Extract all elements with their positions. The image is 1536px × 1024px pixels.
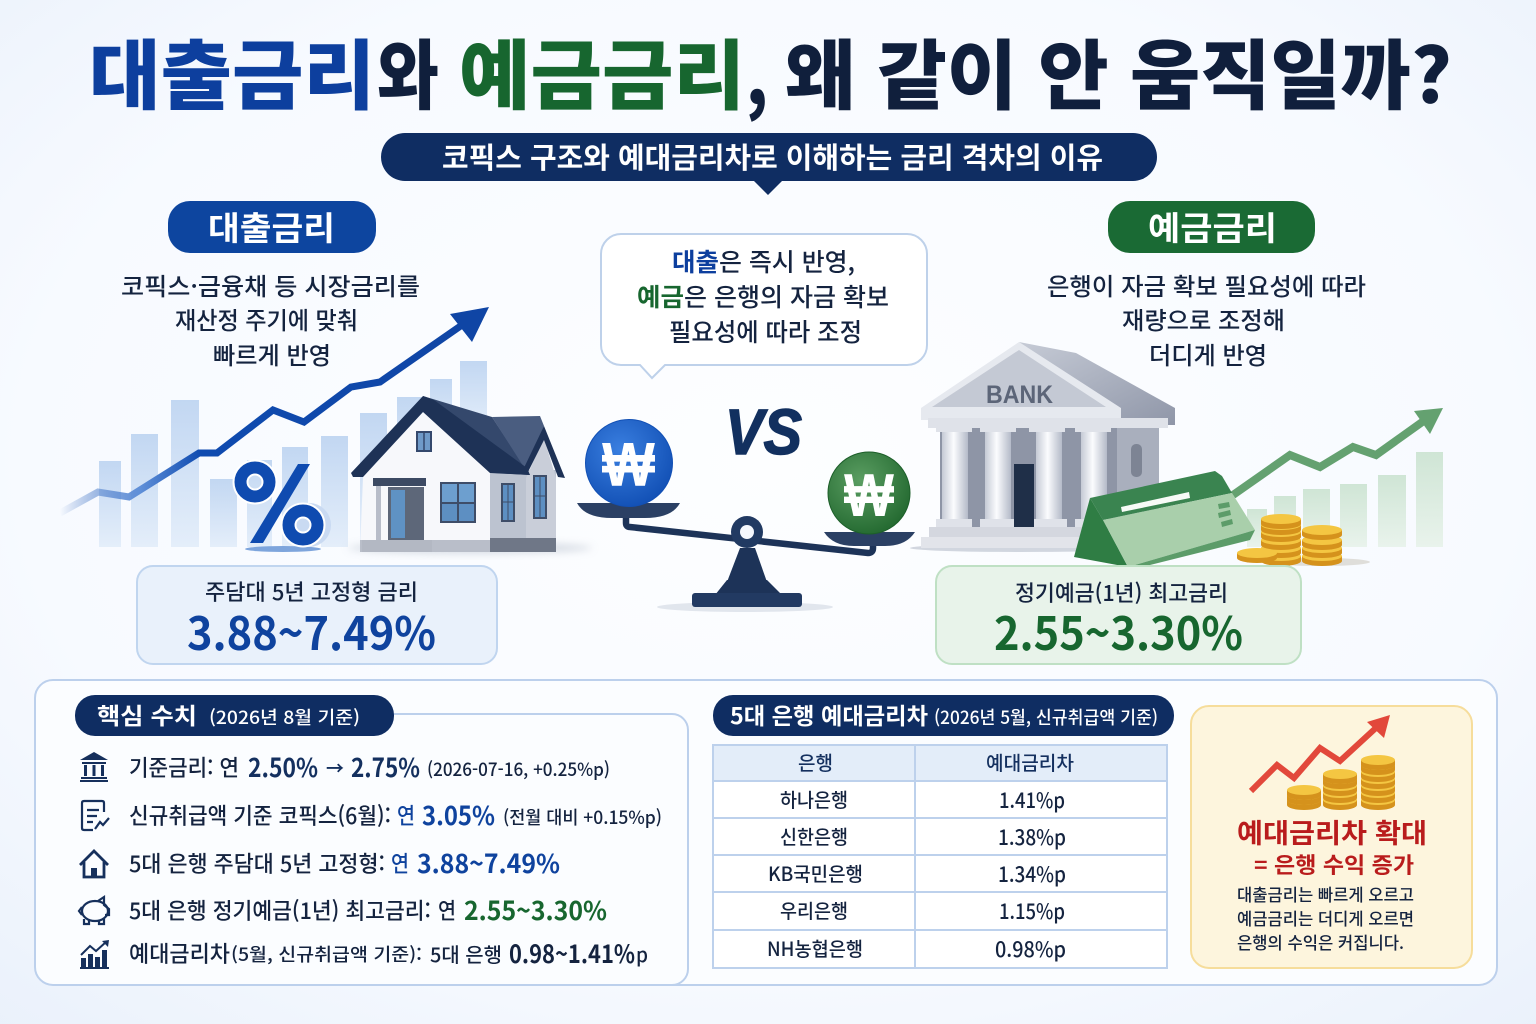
deposit rate heading: 예금금리	[1148, 202, 1277, 250]
row: COFIX: 연	[397, 799, 415, 831]
row: base rate: 기준금리: 연	[129, 751, 239, 783]
row: base rate	[80, 748, 610, 785]
callout: speech bubble: 필요성에 따라 조정	[669, 313, 862, 349]
table: 우리은행	[780, 895, 848, 924]
arrow: loan rate rising	[60, 307, 489, 513]
table: 1.15%p	[999, 896, 1065, 926]
icon: bank building	[910, 342, 1175, 552]
row: spread: 5대 은행	[430, 939, 502, 968]
icon: green won coin: ₩	[844, 462, 894, 529]
icon: bank	[80, 752, 108, 782]
icon: passbook	[1074, 471, 1255, 570]
value box: deposit rate: 2.55~3.30%	[994, 598, 1243, 664]
title: 대출금리	[89, 15, 375, 125]
loan rate description: 코픽스·금융채 등 시장금리를	[121, 267, 420, 302]
row: mortgage: 연	[391, 847, 409, 879]
title: 예금금리	[459, 15, 745, 125]
deposit rate description: 재량으로 조정해	[1122, 301, 1285, 336]
table: 1.34%p	[998, 859, 1066, 889]
table heading: (2026년 5월, 신규취급액 기준)	[934, 704, 1158, 730]
table: 1.41%p	[999, 785, 1065, 815]
table: 은행	[798, 747, 833, 776]
icon: bar chart	[80, 940, 109, 969]
value box: deposit rate	[936, 566, 1301, 664]
table heading: 5대 은행 예대금리차	[730, 697, 928, 731]
icon: bank building: BANK	[986, 381, 1053, 409]
value box: mortgage rate	[137, 566, 497, 664]
subtitle banner: 코픽스 구조와 예대금리차로 이해하는 금리 격차의 이유	[442, 135, 1103, 177]
table: NH농협은행	[767, 933, 863, 962]
panel: spread widening callout	[1191, 706, 1472, 968]
panel: spread widening callout: 대출금리는 빠르게 오르고	[1237, 881, 1414, 906]
table: 예대금리차	[986, 747, 1074, 776]
icon: piggy bank	[79, 897, 109, 924]
arrow: red rising	[1251, 715, 1390, 791]
icon: house	[348, 396, 592, 554]
table: 하나은행	[780, 784, 848, 813]
row: spread: 예대금리차	[129, 937, 230, 969]
row: base rate: →	[326, 755, 344, 781]
icon: percent	[240, 464, 331, 552]
icon: document chart	[82, 801, 109, 830]
value box: deposit rate: 정기예금(1년) 최고금리	[1015, 576, 1228, 608]
loan rate heading	[168, 201, 376, 253]
row: mortgage	[80, 844, 560, 881]
table: 1.38%p	[998, 822, 1066, 852]
icon: green won coin	[828, 452, 910, 534]
deposit rate heading	[1108, 201, 1315, 253]
bar chart: loan background bars	[99, 361, 487, 547]
bar chart: deposit background bars	[1247, 452, 1443, 547]
key figures heading: (2026년 8월 기준)	[209, 704, 360, 730]
callout: speech bubble: 은 은행의 자금 확보	[684, 278, 889, 314]
row: deposit: 연	[438, 894, 456, 926]
row: COFIX: 3.05%	[422, 796, 495, 833]
title: ,	[746, 15, 768, 125]
loan rate description: 빠르게 반영	[213, 336, 331, 371]
callout: speech bubble	[601, 234, 927, 378]
title	[89, 15, 1452, 125]
deposit rate description: 은행이 자금 확보 필요성에 따라	[1047, 267, 1366, 302]
callout: speech bubble: 예금	[637, 278, 684, 314]
table: 신한은행	[780, 821, 848, 850]
row: base rate: (2026-07-16, +0.25%p)	[427, 756, 610, 782]
key figures heading: 핵심 수치	[97, 697, 197, 731]
title: 와	[377, 15, 439, 125]
row: base rate: 2.50%	[248, 748, 318, 785]
icon: home	[80, 851, 108, 877]
row: base rate: 2.75%	[351, 748, 420, 785]
panel: bank spread table	[713, 695, 1174, 968]
callout: speech bubble: 은 즉시 반영,	[719, 243, 855, 279]
table: KB국민은행	[768, 858, 863, 887]
key figures heading	[75, 695, 394, 736]
subtitle banner	[381, 133, 1157, 195]
panel: spread widening callout: 예금금리는 더디게 오르면	[1237, 905, 1414, 930]
row: deposit	[79, 891, 607, 928]
row: mortgage: 5대 은행 주담대 5년 고정형:	[129, 847, 385, 879]
table: 0.98%p	[995, 934, 1066, 964]
panel: key figures	[75, 695, 662, 971]
panel: comparison center	[577, 234, 927, 612]
panel: deposit rate	[910, 201, 1443, 664]
panel: spread widening callout: = 은행 수익 증가	[1254, 848, 1414, 880]
title: 왜 같이 안 움직일까?	[785, 15, 1452, 125]
row: spread: p	[636, 939, 648, 968]
panel: bottom data	[35, 680, 1497, 985]
icon: blue won coin: ₩	[602, 431, 655, 500]
row: spread: (5월, 신규취급액 기준):	[231, 941, 422, 967]
arrow: deposit rate rising	[1233, 408, 1443, 495]
deposit rate description: 더디게 반영	[1149, 336, 1267, 371]
table heading	[713, 695, 1174, 736]
VS label: VS	[725, 396, 802, 468]
loan rate description	[121, 267, 420, 371]
callout: speech bubble: 대출	[672, 243, 719, 279]
panel: loan rate	[60, 201, 592, 664]
table	[713, 745, 1167, 968]
row: deposit: 2.55~3.30%	[464, 891, 607, 928]
icon: gold coin stacks	[1237, 514, 1370, 566]
icon: balance scale	[577, 503, 915, 612]
row: spread	[80, 935, 648, 971]
row: deposit: 5대 은행 정기예금(1년) 최고금리:	[129, 894, 431, 926]
row: COFIX: 신규취급액 기준 코픽스(6월):	[129, 799, 391, 831]
value box: mortgage rate: 주담대 5년 고정형 금리	[205, 575, 418, 607]
row: COFIX	[82, 796, 662, 833]
icon: blue won coin	[586, 420, 672, 506]
panel: spread widening callout: 예대금리차 확대	[1237, 812, 1427, 851]
value box: mortgage rate: 3.88~7.49%	[187, 598, 436, 664]
icon: coin stacks	[1287, 755, 1395, 810]
loan rate description: 재산정 주기에 맞춰	[175, 301, 358, 336]
row: COFIX: (전월 대비 +0.15%p)	[503, 804, 662, 830]
panel: spread widening callout: 은행의 수익은 커집니다.	[1237, 929, 1404, 954]
loan rate heading: 대출금리	[208, 202, 335, 250]
row: mortgage: 3.88~7.49%	[417, 844, 560, 881]
deposit rate description	[1047, 267, 1366, 371]
row: spread: 0.98~1.41%	[509, 935, 635, 971]
